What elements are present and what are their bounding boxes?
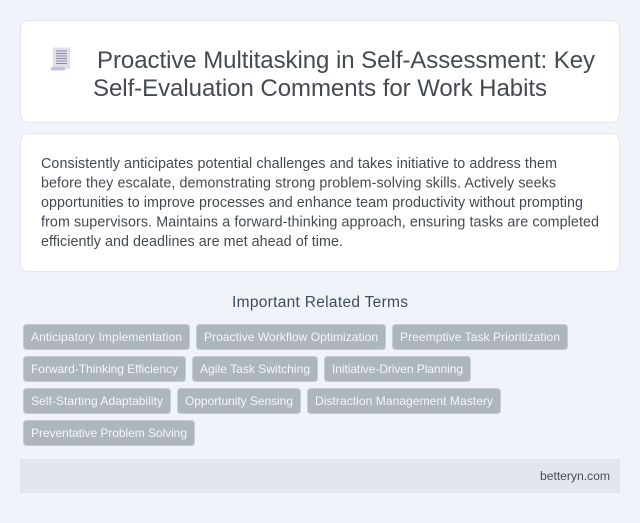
tag group: related terms xyxy=(24,324,568,446)
tag xyxy=(178,388,300,414)
tag xyxy=(308,388,500,414)
text block: self-evaluation comment: efficiently and deadlines are met ahead of time. xyxy=(41,234,343,250)
tag: Initiative-Driven Planning xyxy=(332,362,463,376)
tag xyxy=(324,356,470,382)
title: Proactive Multitasking in Self-Assessment: Key xyxy=(97,47,595,74)
title: Self-Evaluation Comments for Work Habits xyxy=(93,75,547,102)
tag: Agile Task Switching xyxy=(200,362,310,376)
text block: self-evaluation comment: opportunities to improve processes and enhance team productivity without prompting xyxy=(41,195,583,211)
tag xyxy=(24,420,194,446)
tag xyxy=(392,324,568,350)
tag xyxy=(24,356,186,382)
tag xyxy=(196,324,386,350)
tag: Preventative Problem Solving xyxy=(31,426,187,440)
text block: self-evaluation comment: from supervisors. Maintains a forward-thinking approach, ensuring tasks are completed xyxy=(41,214,599,230)
tag: Preemptive Task Prioritization xyxy=(400,330,560,344)
footer: site name: betteryn.com xyxy=(540,469,610,483)
text block: self-evaluation comment: before they escalate, demonstrating strong problem-solving skills. Actively seeks xyxy=(41,176,556,192)
text block: self-evaluation comment xyxy=(41,156,599,250)
icon: document scroll xyxy=(51,48,70,70)
tag xyxy=(192,356,318,382)
tag: Proactive Workflow Optimization xyxy=(204,330,378,344)
tag xyxy=(24,388,170,414)
tag: Opportunity Sensing xyxy=(185,394,293,408)
tag: Forward-Thinking Efficiency xyxy=(31,362,178,376)
tag xyxy=(24,324,190,350)
tag: Self-Starting Adaptability xyxy=(31,394,163,408)
title xyxy=(93,47,595,102)
tag: Distraction Management Mastery xyxy=(315,394,493,408)
tag: Anticipatory Implementation xyxy=(31,330,182,344)
footer xyxy=(20,459,620,493)
text block: self-evaluation comment: Consistently anticipates potential challenges and takes initiative to address them xyxy=(41,156,557,172)
panel: description xyxy=(20,134,620,272)
panel: title card xyxy=(20,20,620,122)
heading: related terms: Important Related Terms xyxy=(232,294,408,311)
